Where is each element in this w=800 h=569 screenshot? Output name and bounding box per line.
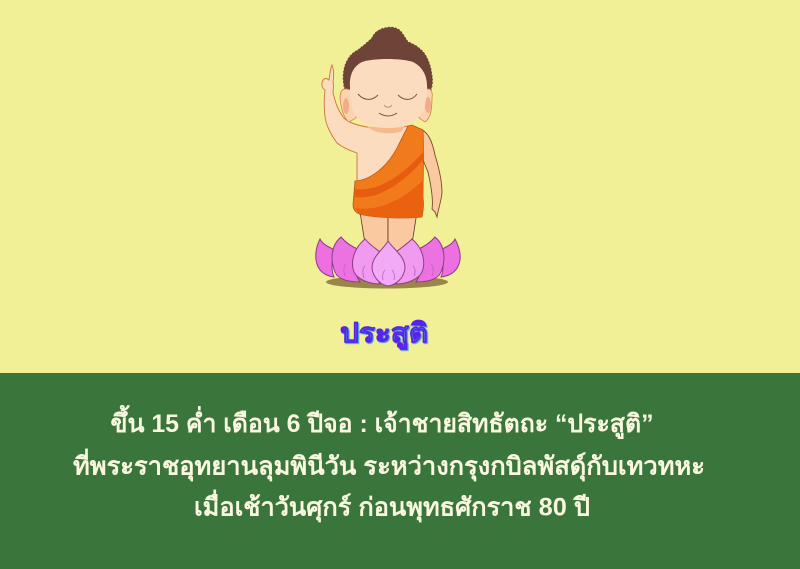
description text: [73, 404, 705, 524]
orange robe: [353, 125, 423, 218]
raised arm and torso: [322, 65, 410, 195]
face features: [358, 94, 417, 116]
second petals: [332, 237, 360, 282]
other arm: [421, 129, 442, 217]
illustration: baby Buddha on lotus: [316, 27, 460, 289]
petal veins: [344, 264, 433, 280]
third petals: [352, 239, 380, 284]
legs: [360, 212, 417, 252]
lotus shadow: [326, 276, 448, 288]
face: [350, 59, 427, 128]
title: ประสูติ: [340, 318, 428, 350]
neck shadow: [366, 126, 405, 133]
line 3: เมื่อเช้าวันศุกร์ ก่อนพุทธศักราช 80 ปี: [194, 490, 590, 524]
centre petal: [372, 241, 405, 286]
outer petals: [316, 239, 335, 277]
line 2: ที่พระราชอุทยานลุมพินีวัน ระหว่างกรุงกบิลพัสดุ์กับเทวทหะ: [73, 448, 705, 482]
lotus flower: [316, 237, 460, 286]
line 1: ขึ้น 15 ค่ำ เดือน 6 ปีจอ : เจ้าชายสิทธัตถะ “ประสูติ”: [110, 404, 654, 440]
top panel: yellow background: [0, 0, 800, 373]
ears: [340, 89, 432, 122]
hair: [343, 27, 432, 92]
bottom panel: green background: [0, 373, 800, 569]
